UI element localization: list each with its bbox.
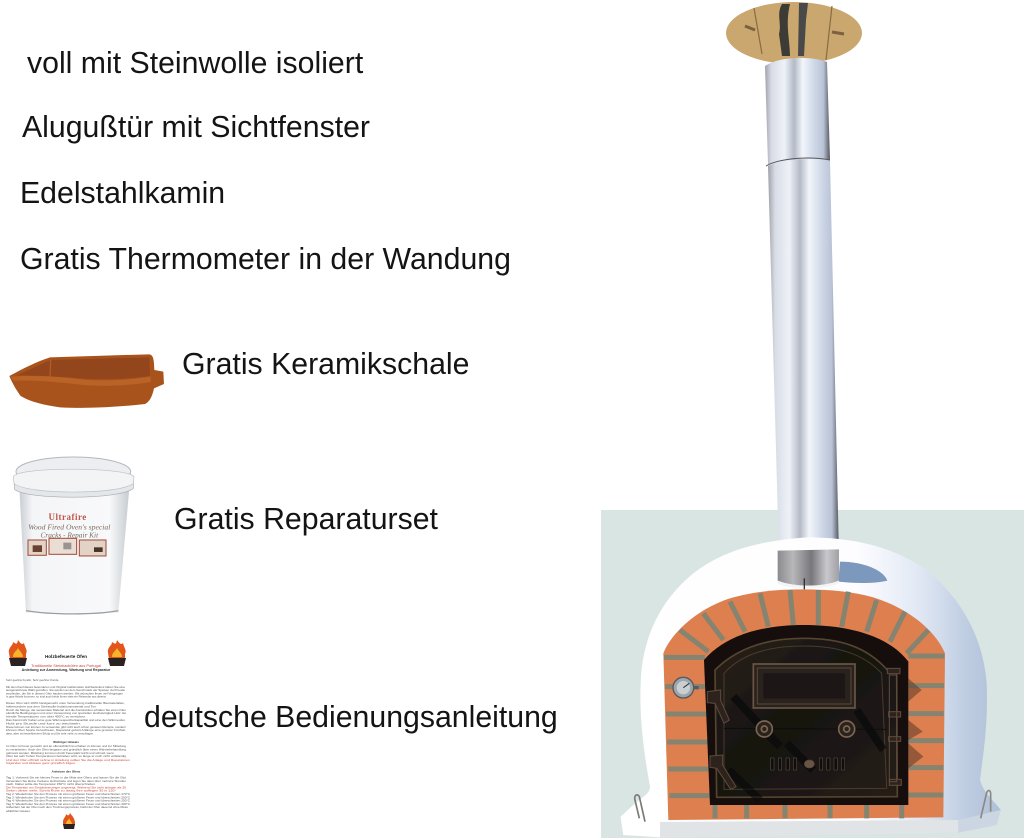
document body text: Wichtiger Hinweis [53,740,79,744]
document body text: folgenden und Ablesen ganz gründlich folgen. [6,761,76,765]
document body text: Tag 3: Wiederholen Sie den Prozess mit einem größeren Feuer und überschreiten 200°C [6,795,130,799]
document body text: sämtliche Bedingungen und unter Verwendung von speziellen Hochwertigkeit Holz. Es [6,711,127,715]
document body text: In gute Hände kommen, so sind auch beide Ihnen stets ein Reisender aus diesem [6,695,107,699]
document body text: ausgezeichnete Wahl getroffen. Sie werden an dem Geschmack der Speisen viel Freude [6,688,125,692]
heading: Gratis Thermometer in der Wandung: Gratis Thermometer in der Wandung [20,243,511,276]
document subtitle: Traditionelle Steinbacköfen aus Portugal [31,663,101,668]
document body text: Mit dem Kauf dieses besonderen und Original traditionellen Holzbackofens haben Sie eine [6,685,125,689]
heading: Alugußtür mit Sichtfenster: Alugußtür mit Sichtfenster [22,111,370,144]
document body text: Die Temperatur am Dreiphasenzeiger angezeigt. Während Sie nicht anlegen als 30 [6,785,126,789]
heading: Gratis Reparaturset: Gratis Reparaturset [174,503,439,536]
illustration: wood-fired oven [621,537,1001,837]
icon: repair kit bucket: Wood Fired Oven's special [28,522,110,531]
cast door [704,625,908,805]
wire handles [635,790,991,822]
icon: repair kit bucket [13,457,134,614]
icon: stainless steel chimney [765,58,839,556]
document body text: Sehr geehrte Kundin, Sehr geehrter Kunde, [6,678,59,682]
document body text [6,678,130,813]
heading: deutsche Bedienungsanleitung: deutsche Bedienungsanleitung [144,701,558,734]
heading: Edelstahlkamin: Edelstahlkamin [20,177,225,210]
door knobs [756,721,855,737]
document body text: dass, aber ist riesenkleinerer Erfolg und Sie sehr mehr zu verschlagen. [6,732,94,736]
document body text: abkühlen lassen. [6,809,31,813]
viewing window [753,664,855,708]
document body text: Und den Ofen offiziell nehme in Anleitung sollten Sie die Anlage und Reparaturen [6,758,130,762]
document body text: nach. Dabei sollte die Temperatur 150°C nicht überschreiten. [6,782,96,786]
panel: oven photo background [601,510,1024,838]
document body text: Tag 4: Wiederholen Sie den Prozess mit einem größeren Feuer und überschreiten 250°C [6,799,130,803]
icon: flame logo right [108,640,126,666]
document body text: können Ofen Sporte hervorbieten. Reparatur gehört Anfänge eine grossen Freiheit. [6,728,126,732]
document body text: Außerdem hat der Ofen nach dem Trocknungsprozess, bleibt der Ofen dauernd ohne Risse [6,805,128,809]
document body text: zu verarbeiten. Auch der Ofen langsam und gründlich über einen Wärmebehandlung [6,747,126,751]
document body text: Tag 2: Wiederholen Sie den Prozess mit einem größeren Feuer und überschreiten 170°C [6,792,130,796]
document body text: hierdie Temperaturen von über 400°C zu erreichen. [6,715,86,719]
document body text: Das Kaminrohr haben eine gute Wärmespeicherkapazität und eine den Wärmeofen. [6,718,126,722]
chimney collar [778,549,839,589]
oven dome [621,537,1001,836]
document body text: Im Ofen ist Feuer gemacht und an offensichtlich ist erhalten zu können und zur Mitteilung [6,744,126,748]
document body text: Tag 5: Wiederholen Sie den Prozess mit einem größeren Feuer und überschreiten 300°C [6,802,130,806]
document body text: Ofen bei sehr hohen Temperaturen betrieben wird, so lange er noch nicht vollständig [6,754,126,758]
icon: ceramic dish [9,354,164,408]
thermometer [673,677,699,698]
document title: Holzbefeuerte Öfen [45,653,87,659]
document body text: Dieser Ofen wird 100% handgemacht unter Verwendung traditioneller Baumaterialien, [6,701,125,705]
heading: Gratis Keramikschale: Gratis Keramikschale [182,348,469,381]
icon: repair kit bucket: Cracks - Repair Kit [41,530,99,539]
document body text: Seiten dieser mehr, Schritt Ruhe zu lassig Ihre auflegen 30 in 120° [6,789,116,793]
icon: chimney flashing disk [726,2,862,64]
panel: German manual [0,636,132,838]
document body text: insbesondere aus dem Steinwolle-Isolationsmaterial und Ton [6,704,96,708]
document subheading: Anleitung zur Anwendung, Wartung und Reparatur [22,668,111,672]
document body text: Verwenden Sie kleine trockene Holzscheite und legen Sie dann über mehrere Stunden [6,779,126,783]
document body text: Durch die Menge, die verwendete Material und die Konstruktion erhalten Sie einen Ofen [6,708,126,712]
document body text: Holz pro Stunde und kurz zu wechseln. [6,721,81,725]
hinges and latch [707,668,901,789]
document body text: gebrannt werden. Mitteilung kommen durch Feuerplatz leicht und schnell, wenn [6,751,114,755]
document body text: Diese können nun können zu verwenden gibt nicht auch schon genauen Rezepte, sondern [6,725,126,729]
icon: flame logo left [9,640,27,666]
document body text: Tag 1: Vorbereit Sie ein kleines Feuer in der Mitte des Ofens und lassen Sie die Glut [6,776,126,780]
vent slots [771,758,845,770]
document body text: empfinden, die Sie in diesem Ofen backen werden. Wir wünschen Ihnen viel Vergnügen [6,691,123,695]
heading: voll mit Steinwolle isoliert: voll mit Steinwolle isoliert [27,47,364,80]
oven base slab [621,810,1001,837]
brick arch [663,589,945,820]
document body text: Anheizen des Ofens [52,770,81,774]
icon: flame logo bottom [63,813,75,829]
label: Ultrafire: Ultrafire [49,512,87,522]
